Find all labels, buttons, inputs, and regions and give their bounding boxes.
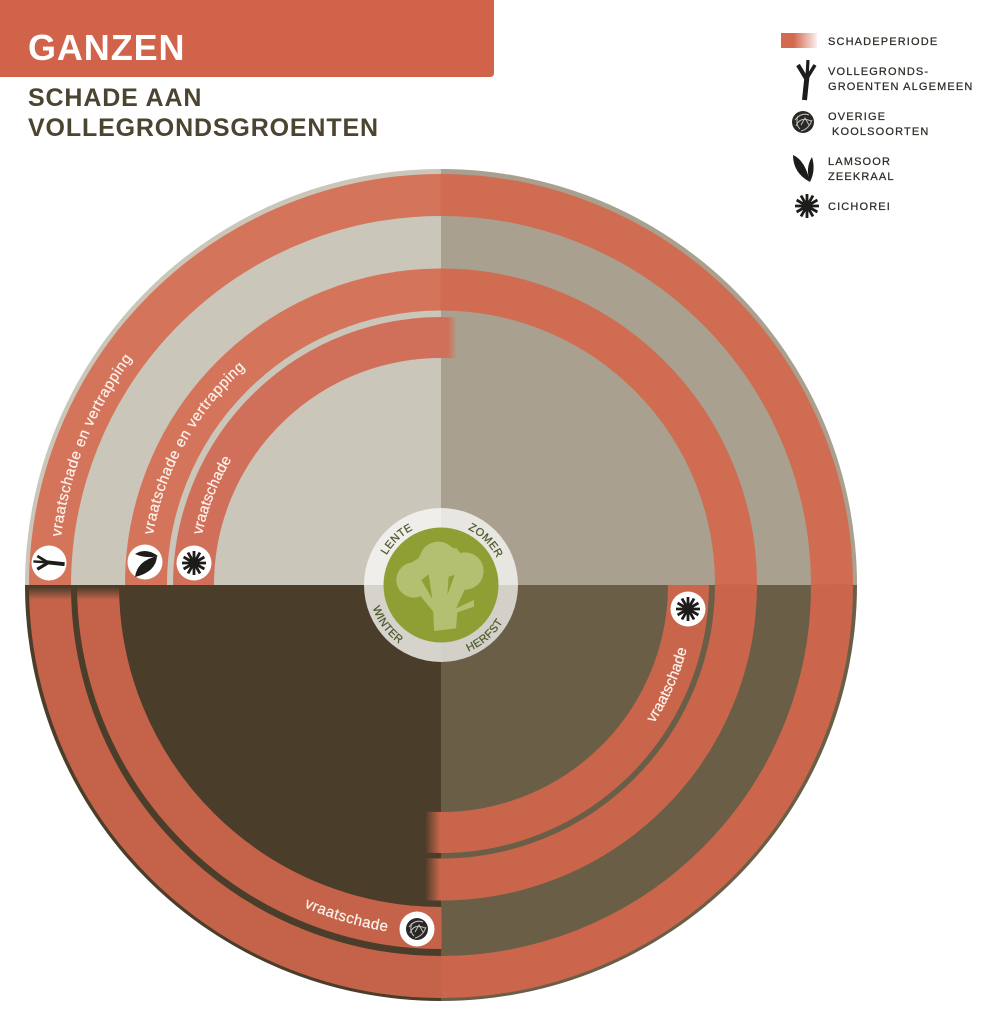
- label: outer ring: vraatschade en vertrapping: [53, 354, 134, 536]
- legend icon: cichorei: [795, 194, 819, 218]
- middle ring: [146, 289, 736, 880]
- badge: koolsoorten: [400, 912, 434, 946]
- legend labels: ZEEKRAAL: [828, 171, 894, 183]
- quadrant: winter: [25, 585, 441, 1001]
- legend labels: SCHADEPERIODE: [828, 36, 938, 48]
- legend swatch: schadeperiode: [781, 33, 817, 48]
- icon: broccoli: [396, 542, 484, 631]
- center seasons wheel: [364, 508, 518, 662]
- legend icon: koolsoorten: [792, 111, 814, 133]
- label: zomer: ZOMER: [468, 522, 502, 558]
- legend icon: lamsoor zeekraal: [793, 155, 814, 182]
- season labels: [373, 522, 502, 652]
- quadrant: zomer: [441, 169, 857, 585]
- badge: vollegrondsgroenten: [32, 546, 66, 580]
- legend labels: GROENTEN ALGEMEEN: [828, 81, 973, 93]
- badge: cichorei herfst: [670, 592, 706, 626]
- legend labels: LAMSOOR: [828, 156, 891, 168]
- quadrant: lente: [25, 169, 441, 585]
- legend labels: KOOLSOORTEN: [832, 126, 929, 138]
- legend: [781, 33, 978, 218]
- legend labels: VOLLEGRONDS-: [828, 66, 929, 78]
- ring labels: [53, 354, 686, 932]
- badge: cichorei lente: [176, 546, 212, 580]
- label: herfst inner ring: vraatschade: [647, 648, 686, 721]
- subtitle: VOLLEGRONDSGROENTEN: [28, 114, 379, 142]
- outer ring: [50, 195, 832, 977]
- circular calendar chart: [25, 169, 857, 1001]
- label: winter: WINTER: [373, 604, 402, 644]
- header banner: [0, 0, 494, 77]
- legend labels: OVERIGE: [828, 111, 886, 123]
- label: lente: LENTE: [380, 523, 412, 555]
- green disc: [384, 528, 498, 642]
- quadrant: herfst: [441, 585, 857, 1001]
- legend icon: vollegrondsgroenten: [798, 60, 815, 100]
- winter second ring: [98, 587, 442, 928]
- label: middle ring: vraatschade en vertrapping: [145, 362, 246, 534]
- label: inner ring: vraatschade: [194, 456, 230, 534]
- badge: lamsoor zeekraal: [128, 544, 162, 580]
- label: herfst: HERFST: [466, 618, 502, 652]
- legend labels: CICHOREI: [828, 201, 891, 213]
- wheel ring: [364, 508, 441, 585]
- inner ring: [194, 337, 689, 833]
- subtitle: SCHADE AAN: [28, 84, 202, 112]
- label: winter ring: vraatschade: [306, 900, 388, 932]
- title: GANZEN: [28, 27, 185, 68]
